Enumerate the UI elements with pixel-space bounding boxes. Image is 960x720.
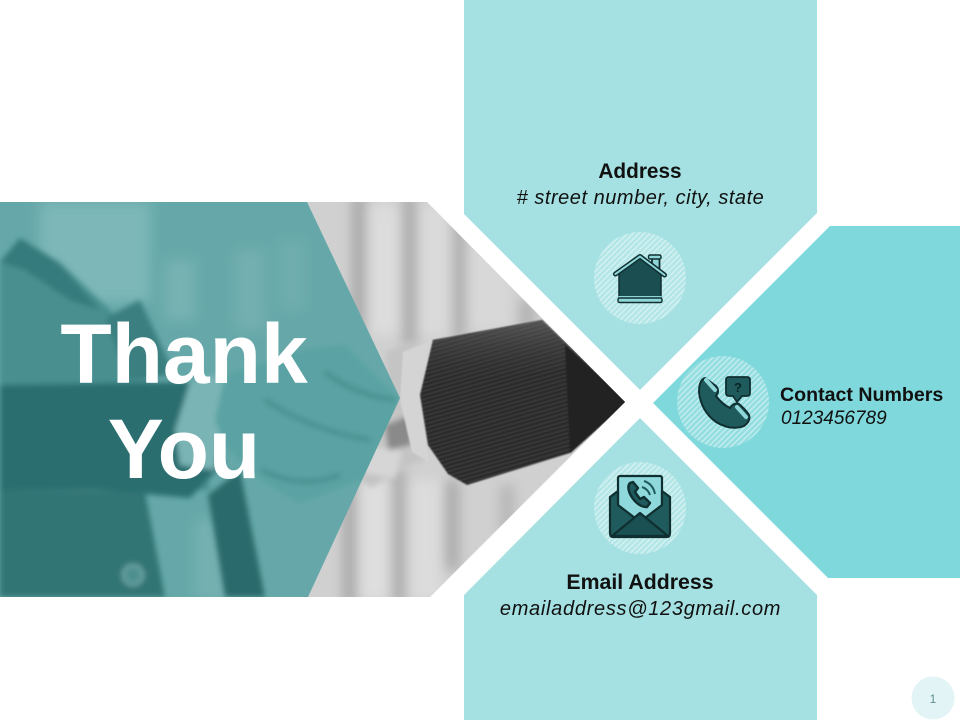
title: Thank You bbox=[60, 307, 308, 496]
gray hands under cuff bbox=[362, 350, 421, 488]
dark sleeve bbox=[0, 382, 225, 498]
dark sleeve bbox=[420, 320, 627, 485]
text: street address: # street number, city, state bbox=[517, 187, 764, 209]
panel: email address bbox=[464, 418, 817, 720]
blurred background bbox=[40, 202, 150, 302]
hand bbox=[215, 345, 400, 503]
icon: hatched circle with house bbox=[594, 232, 686, 324]
shirt cuff bbox=[175, 372, 225, 470]
heading: email address: Email Address bbox=[566, 570, 714, 594]
icon: hatched circle with phone bbox=[677, 356, 769, 448]
panel: teal photo overlay bbox=[0, 202, 420, 602]
shirt cuff bbox=[400, 346, 426, 458]
tie bbox=[208, 470, 265, 597]
text: phone number: 0123456789 bbox=[781, 408, 887, 429]
icon: hatched circle with phone: ? bbox=[734, 380, 742, 395]
title: Thank You: You bbox=[108, 402, 260, 496]
heading: address: Address bbox=[598, 160, 682, 183]
page number badge: 1 bbox=[930, 692, 937, 706]
panel: handshake photo bbox=[307, 202, 625, 597]
title: Thank You: Thank bbox=[60, 307, 308, 401]
heading: contact numbers: Contact Numbers bbox=[780, 384, 943, 406]
jacket bbox=[0, 249, 211, 492]
photo background with blurred columns bbox=[307, 202, 616, 597]
panel: address bbox=[464, 0, 817, 390]
text: email: emailaddress@123gmail.com bbox=[500, 598, 781, 620]
panel: contact numbers bbox=[653, 226, 960, 578]
icon: hatched circle with envelope bbox=[594, 462, 686, 554]
page number badge bbox=[912, 676, 954, 720]
